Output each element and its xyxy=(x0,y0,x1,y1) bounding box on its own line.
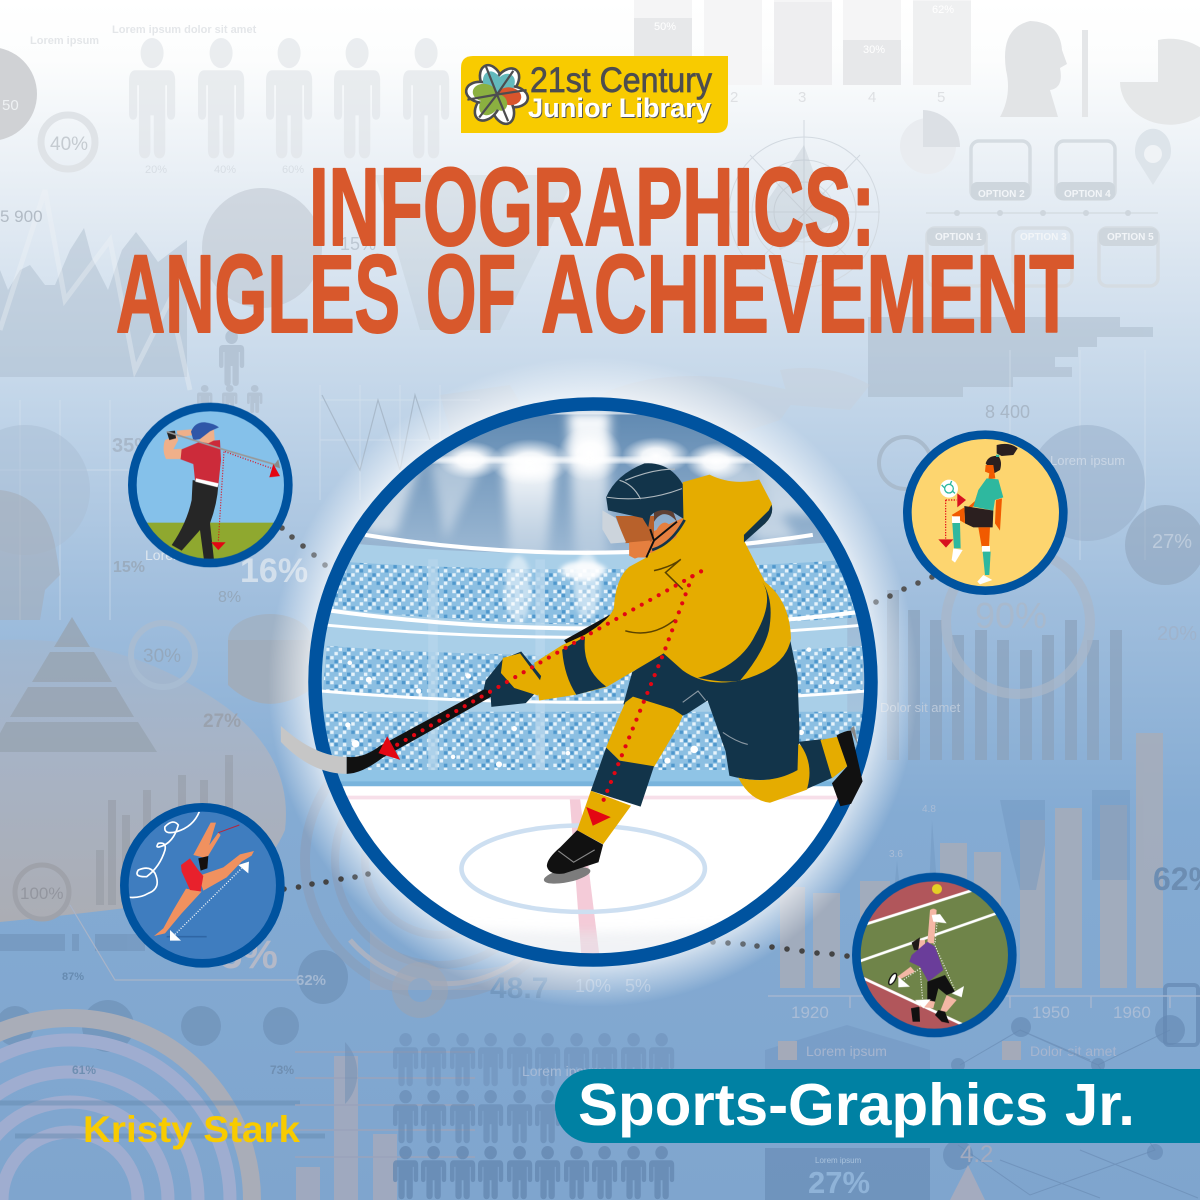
grid lines xyxy=(0,350,1145,620)
title: OF xyxy=(426,233,516,356)
background: faded infographic collage: 20% xyxy=(145,164,167,176)
text: 21st Century: 21st Century xyxy=(530,61,712,100)
connector dots: gymnast to main circle xyxy=(281,871,371,892)
network circles xyxy=(0,950,348,1052)
rear leg xyxy=(738,726,863,806)
background: faded infographic collage: 5% xyxy=(625,976,651,996)
background: faded infographic collage: Lorem ipsum xyxy=(522,1063,603,1079)
icon: flower xyxy=(465,62,529,127)
logo: 21st Century Junior Library xyxy=(461,56,728,133)
hexagon 27% xyxy=(765,1148,930,1200)
background: faded infographic collage: 8% xyxy=(218,589,241,606)
background: faded infographic collage: 3 xyxy=(798,89,806,106)
background: faded infographic collage: 5 xyxy=(937,89,945,106)
head xyxy=(602,463,685,559)
background: faded infographic collage: 30% xyxy=(863,44,885,56)
text: Junior Library: Junior Library xyxy=(528,93,711,123)
jersey xyxy=(534,475,791,700)
background: faded infographic collage: 16% xyxy=(240,552,308,590)
background: faded infographic collage: 5 900 xyxy=(0,207,43,226)
option boxes: OPTION 3 xyxy=(1020,232,1067,243)
background: faded infographic collage: 50% xyxy=(654,21,676,33)
background: faded infographic collage: 100% xyxy=(20,884,63,903)
head silhouette xyxy=(1000,21,1067,117)
background: faded infographic collage: 61% xyxy=(72,1063,96,1077)
background: faded infographic collage: 35% xyxy=(112,435,152,457)
background: faded infographic collage: 27% xyxy=(203,711,241,732)
background: faded infographic collage: Lorem xyxy=(145,547,185,563)
gray blob left xyxy=(0,640,286,922)
title: INFOGRAPHICS: xyxy=(309,146,875,269)
bars left xyxy=(96,755,233,905)
persons left middle xyxy=(197,330,262,413)
ring xyxy=(907,435,1063,591)
author name: Kristy Stark xyxy=(83,1109,300,1150)
background: faded infographic collage: 1920 xyxy=(791,1003,829,1022)
front leg xyxy=(547,697,683,874)
background: faded infographic collage: 50 xyxy=(2,97,19,114)
background: faded infographic collage: 62% xyxy=(296,972,326,989)
golfer circle xyxy=(128,402,293,568)
background: faded infographic collage: 15% xyxy=(113,559,145,576)
option boxes: OPTION 2 xyxy=(978,189,1025,200)
connector dots: tennis to main circle xyxy=(710,939,850,959)
segmented bar xyxy=(0,934,145,951)
background: faded infographic collage: 40% xyxy=(50,134,88,155)
background: faded infographic collage: 62% xyxy=(932,4,954,16)
chart 1920-1960 bars xyxy=(780,733,1163,988)
horizontal bars xyxy=(868,317,1153,397)
pants xyxy=(623,638,799,780)
background: faded infographic collage: 87% xyxy=(62,971,84,983)
background: faded infographic collage: 60% xyxy=(282,164,304,176)
donut 30% xyxy=(131,623,195,687)
stadium upper xyxy=(359,410,864,712)
background: faded infographic collage: 3.6 xyxy=(889,849,903,860)
stick xyxy=(281,615,612,774)
background: faded infographic collage: 30% xyxy=(143,646,181,667)
background: faded infographic collage: Dolor sit amet xyxy=(1030,1043,1116,1059)
stands xyxy=(322,542,848,712)
mid right bars xyxy=(887,590,1122,760)
location pin xyxy=(1135,129,1171,185)
option boxes: OPTION 5 xyxy=(1107,232,1154,243)
background: faded infographic collage: 20% xyxy=(1157,623,1197,645)
sparkles xyxy=(345,647,835,767)
background: faded infographic collage: 27% xyxy=(1152,531,1192,553)
glow behind main circle xyxy=(268,357,918,1007)
red dotted arrows xyxy=(396,571,701,808)
background: faded infographic collage: 4.8 xyxy=(922,804,936,815)
gymnast circle xyxy=(120,803,285,968)
option boxes xyxy=(926,141,1158,286)
rink and stadium xyxy=(322,410,864,954)
people chart top xyxy=(129,38,449,158)
legend squares xyxy=(778,1041,797,1060)
background: faded infographic collage: Lorem ipsum xyxy=(1050,453,1125,468)
background: faded infographic collage: Dolor sit amet xyxy=(880,700,961,715)
background: faded infographic collage: Lorem ipsum xyxy=(30,35,99,47)
pyramid xyxy=(0,617,157,752)
donut 100% xyxy=(15,865,69,919)
background: faded infographic collage: 73% xyxy=(270,1063,294,1077)
pies right xyxy=(1120,39,1200,125)
ring xyxy=(132,407,288,563)
text: Junior Library: Junior Library xyxy=(529,94,712,124)
tennis player circle xyxy=(852,872,1017,1038)
ring xyxy=(856,877,1012,1033)
ice xyxy=(300,786,886,974)
background: faded infographic collage: 27% xyxy=(808,1165,870,1200)
main background arcs xyxy=(305,725,575,995)
main hockey scene xyxy=(281,400,886,974)
circles top left xyxy=(0,47,37,141)
pie chart center xyxy=(202,188,322,308)
background: faded infographic collage: 10% xyxy=(575,976,611,996)
background: faded infographic collage: 90% xyxy=(975,595,1047,636)
3D pie xyxy=(228,614,312,666)
ring xyxy=(124,807,280,963)
world map xyxy=(440,368,870,460)
concentric arcs bottom left xyxy=(0,1018,252,1200)
background: faded infographic collage: 4.2 xyxy=(960,1141,993,1168)
network bottom right xyxy=(958,1030,1198,1198)
option boxes: OPTION 1 xyxy=(935,232,982,243)
hockey player xyxy=(281,463,863,887)
soccer player circle xyxy=(903,430,1068,595)
background: faded infographic collage: 8 400 xyxy=(985,402,1030,422)
area chart xyxy=(0,228,187,377)
background: faded infographic collage: 4 xyxy=(868,89,876,106)
background: faded infographic collage: Lorem ipsum xyxy=(815,1156,862,1165)
background: faded infographic collage: 5% xyxy=(220,933,278,977)
radar chart xyxy=(729,120,880,290)
title xyxy=(116,146,1074,356)
blue ring xyxy=(315,404,871,960)
connector dots: soccer to main circle xyxy=(873,574,935,605)
option boxes: OPTION 4 xyxy=(1064,189,1111,200)
glove xyxy=(484,652,541,707)
background: faded infographic collage: 1960 xyxy=(1113,1003,1151,1022)
background: faded infographic collage: 15% xyxy=(340,234,376,254)
bars top right xyxy=(634,0,971,85)
bars and people bottom center xyxy=(296,1056,397,1200)
background: faded infographic collage: 48.7 xyxy=(490,972,548,1005)
background: faded infographic collage: Lorem ipsum xyxy=(806,1043,887,1059)
background: faded infographic collage: 40% xyxy=(214,164,236,176)
arm band xyxy=(562,636,606,695)
series banner: Sports-Graphics Jr. xyxy=(578,1072,1135,1138)
background: faded infographic collage: Lorem ipsum dolor sit amet xyxy=(112,24,257,36)
title: ANGLES xyxy=(116,233,400,356)
heads & circles left xyxy=(0,425,90,555)
connector dots: golfer to main circle xyxy=(279,525,328,568)
background: faded infographic collage: 2 xyxy=(730,89,738,106)
background: faded infographic collage: 1950 xyxy=(1032,1003,1070,1022)
skate shadow xyxy=(542,864,592,887)
